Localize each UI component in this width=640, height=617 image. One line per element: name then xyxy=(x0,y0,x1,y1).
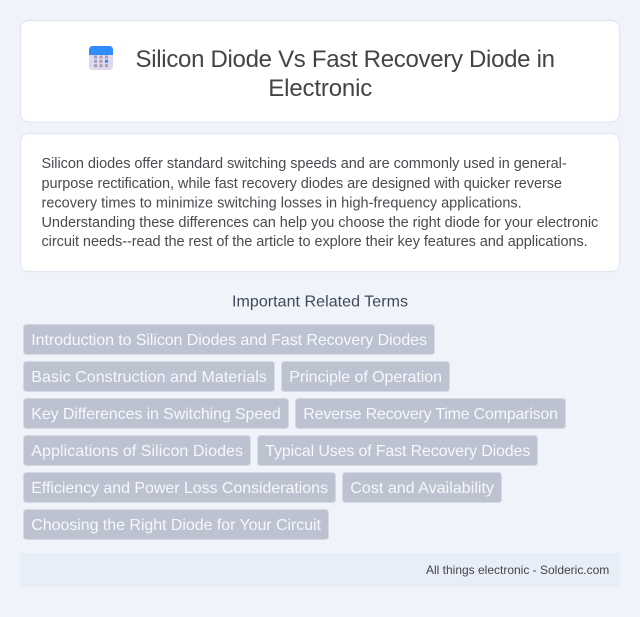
text block: intro: purpose rectification, while fast recovery diodes are designed with quicker reverse xyxy=(42,176,562,192)
text block: intro: Silicon diodes offer standard switching speeds and are commonly used in general- xyxy=(42,156,567,172)
panel: intro paragraph xyxy=(20,134,620,272)
tag: efficiency xyxy=(24,472,336,502)
tag: introduction xyxy=(24,324,434,354)
tag: choosing: Choosing the Right Diode for Your Circuit xyxy=(31,517,322,534)
tag: choosing xyxy=(24,510,328,540)
tag: principle: Principle of Operation xyxy=(289,369,442,386)
panel: header card xyxy=(20,20,620,122)
text block: intro: Understanding these differences can help you choose the right diode for your electronic xyxy=(42,215,598,231)
tag: reverse recovery xyxy=(296,398,566,428)
tag: fast recovery uses: Typical Uses of Fast Recovery Diodes xyxy=(265,443,530,460)
tag: silicon applications xyxy=(24,436,250,466)
icon: calendar xyxy=(89,46,113,70)
tag: switching speed xyxy=(24,398,288,428)
tag: principle xyxy=(282,362,450,392)
title: Silicon Diode Vs Fast Recovery Diode in xyxy=(136,46,555,73)
footer: All things electronic - Solderic.com xyxy=(426,563,609,577)
text block: intro: recovery times to minimize switching losses in high-frequency applications. xyxy=(42,196,522,212)
footer xyxy=(20,553,620,587)
text block: intro: circuit needs--read the rest of the article to explore their key features and applications. xyxy=(42,234,588,250)
title: Electronic xyxy=(268,75,372,102)
tag: fast recovery uses xyxy=(258,436,538,466)
heading: related terms: Important Related Terms xyxy=(232,294,408,311)
tag: cost xyxy=(342,472,502,502)
tag: switching speed: Key Differences in Switching Speed xyxy=(31,406,281,423)
tag: construction: Basic Construction and Materials xyxy=(31,369,267,386)
text block: intro xyxy=(42,156,598,250)
tag: cost: Cost and Availability xyxy=(350,480,494,497)
tag: reverse recovery: Reverse Recovery Time Comparison xyxy=(303,406,558,423)
tag: efficiency: Efficiency and Power Loss Considerations xyxy=(31,480,328,497)
title xyxy=(136,46,555,102)
tag list xyxy=(24,324,566,540)
tag: introduction: Introduction to Silicon Diodes and Fast Recovery Diodes xyxy=(31,332,427,349)
tag: silicon applications: Applications of Silicon Diodes xyxy=(31,443,243,460)
tag: construction xyxy=(24,362,274,392)
